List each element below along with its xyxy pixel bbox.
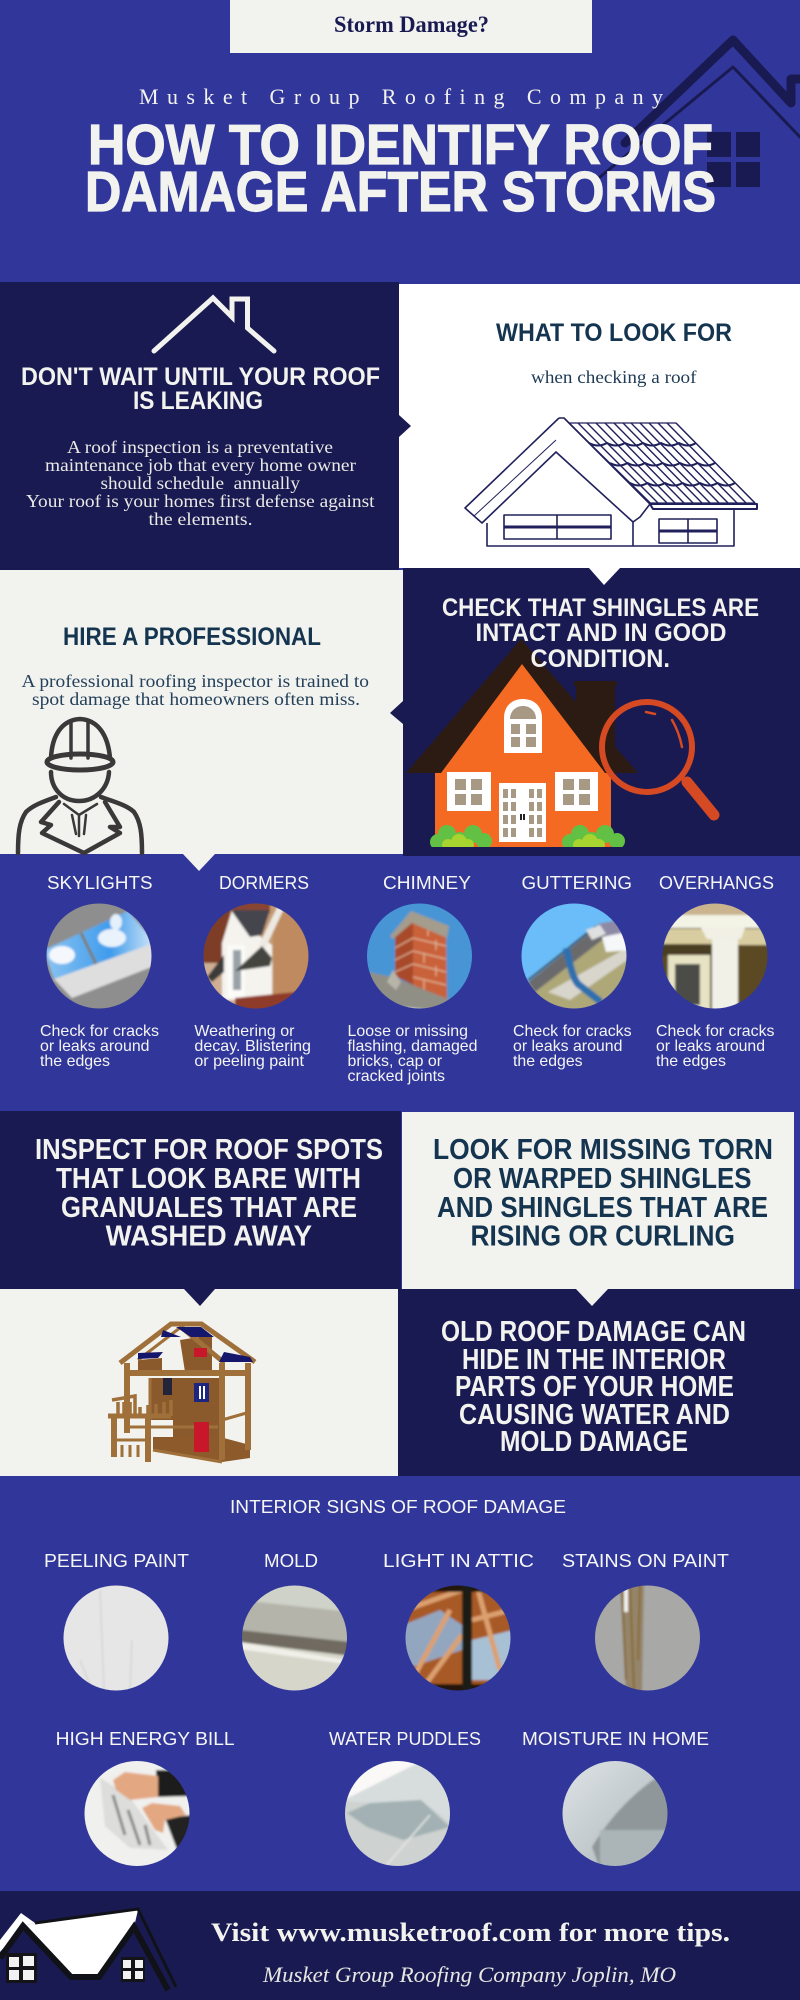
arrow: pointer left <box>390 701 403 724</box>
heading <box>433 1134 773 1253</box>
icon: magnifying glass <box>602 702 714 815</box>
photo: dormer <box>201 901 311 1011</box>
text block: A professional roofing inspector is trained to <box>22 671 369 691</box>
sign: water puddles <box>329 1728 481 1869</box>
bushes <box>428 825 628 856</box>
sign: peeling paint <box>44 1550 189 1693</box>
photo: water puddle <box>342 1759 453 1869</box>
description <box>348 1023 478 1085</box>
door <box>499 783 546 842</box>
description: the edges <box>656 1053 726 1070</box>
panel: wooden house illustration <box>0 1289 398 1476</box>
photo: skylight <box>44 901 154 1011</box>
sign: stains on paint <box>562 1550 729 1693</box>
text block: maintenance job that every home owner <box>45 455 356 475</box>
heading <box>35 1134 383 1253</box>
heading: HIRE A PROFESSIONAL <box>63 623 321 651</box>
feature: guttering <box>513 872 632 1070</box>
badge: storm damage <box>230 0 592 53</box>
illustration: orange house <box>406 639 638 856</box>
heading: AND SHINGLES THAT ARE <box>437 1192 768 1224</box>
sign: mold: MOLD <box>264 1550 318 1571</box>
photo: mold <box>239 1583 350 1693</box>
location line: Musket Group Roofing Company Joplin, MO <box>262 1962 676 1987</box>
feature: skylights <box>40 872 159 1070</box>
feature: dormers <box>194 872 311 1070</box>
text block: Your roof is your homes first defense against <box>26 491 374 511</box>
description: Weathering or <box>194 1023 295 1040</box>
description: decay. Blistering <box>194 1038 311 1055</box>
arrow: pointer down <box>184 1289 215 1306</box>
description <box>513 1023 632 1070</box>
heading: OR WARPED SHINGLES <box>453 1163 752 1195</box>
sign: light in attic <box>383 1550 534 1693</box>
text block: should schedule annually <box>100 473 300 493</box>
photo: moisture <box>560 1759 670 1869</box>
heading <box>21 363 380 415</box>
label: OVERHANGS <box>659 872 774 893</box>
icon: house outline behind title <box>600 40 800 187</box>
panel: check that shingles are intact <box>390 568 800 856</box>
description <box>194 1023 311 1070</box>
description: Check for cracks <box>656 1023 774 1040</box>
photo: attic <box>403 1583 513 1693</box>
heading: WASHED AWAY <box>106 1221 312 1253</box>
description <box>656 1023 774 1070</box>
description: Check for cracks <box>40 1023 159 1040</box>
panel: roof features <box>40 854 774 1085</box>
description: or leaks around <box>513 1038 622 1055</box>
sign: peeling paint: PEELING PAINT <box>44 1550 189 1571</box>
sign: moisture in home: MOISTURE IN HOME <box>522 1728 709 1749</box>
arrow: pointer down from white panel <box>589 568 620 585</box>
text block: A roof inspection is a preventative <box>67 437 333 457</box>
label: CHIMNEY <box>383 872 471 893</box>
heading: MOLD DAMAGE <box>500 1426 688 1458</box>
heading: OLD ROOF DAMAGE CAN <box>441 1316 746 1348</box>
sign: light in attic: LIGHT IN ATTIC <box>383 1550 534 1571</box>
sign: stains on paint: STAINS ON PAINT <box>562 1550 729 1571</box>
description: the edges <box>513 1053 583 1070</box>
call to action: Visit www.musketroof.com for more tips. <box>211 1918 730 1947</box>
heading: IS LEAKING <box>133 387 263 415</box>
text block <box>22 671 369 709</box>
arrow: pointer down <box>576 1289 608 1306</box>
subheading: when checking a roof <box>531 367 697 387</box>
heading: CHECK THAT SHINGLES ARE <box>442 594 759 622</box>
label: SKYLIGHTS <box>47 872 152 893</box>
windows <box>6 1953 145 1983</box>
photo: gutter <box>519 901 630 1011</box>
arrow: pointer down from light panel <box>183 854 215 871</box>
heading: CAUSING WATER AND <box>459 1399 730 1431</box>
icon: roof with chimney <box>154 298 274 351</box>
description: bricks, cap or <box>348 1053 443 1070</box>
description: cracked joints <box>348 1068 445 1085</box>
text block: spot damage that homeowners often miss. <box>32 689 360 709</box>
heading: HIDE IN THE INTERIOR <box>462 1344 726 1376</box>
heading: INTERIOR SIGNS OF ROOF DAMAGE <box>230 1496 566 1517</box>
heading: GRANUALES THAT ARE <box>61 1192 357 1224</box>
heading: THAT LOOK BARE WITH <box>56 1163 361 1195</box>
title: DAMAGE AFTER STORMS <box>85 160 716 223</box>
heading <box>442 594 759 673</box>
icon: house line drawing <box>465 418 757 546</box>
description: or peeling paint <box>194 1053 305 1070</box>
footer <box>0 1891 800 2000</box>
description: Loose or missing <box>348 1023 468 1040</box>
title: HOW TO IDENTIFY ROOF <box>88 113 713 176</box>
photo: overhang <box>660 901 770 1011</box>
panel: look for missing shingles <box>402 1112 794 1289</box>
sign: moisture in home <box>522 1728 709 1869</box>
title <box>85 113 716 223</box>
description: or leaks around <box>40 1038 150 1055</box>
label: DORMERS <box>219 872 309 893</box>
house windows <box>447 772 598 811</box>
illustration: wooden house frame <box>108 1324 255 1462</box>
description: or leaks around <box>656 1038 765 1055</box>
feature: chimney <box>348 872 478 1085</box>
panel: interior signs <box>44 1496 729 1869</box>
heading: RISING OR CURLING <box>470 1221 735 1253</box>
label: GUTTERING <box>522 872 632 893</box>
panel: what to look for <box>399 284 800 568</box>
icon: roofing inspector <box>18 719 142 853</box>
photo: bill <box>82 1759 192 1869</box>
heading: PARTS OF YOUR HOME <box>455 1371 734 1403</box>
sign: water puddles: WATER PUDDLES <box>329 1728 481 1749</box>
panel: inspect for roof spots <box>0 1111 401 1289</box>
heading: INTACT AND IN GOOD <box>476 619 726 647</box>
heading: DON'T WAIT UNTIL YOUR ROOF <box>21 363 380 391</box>
badge: storm damage: Storm Damage? <box>334 12 489 37</box>
photo: chimney <box>367 904 472 1008</box>
sign: high energy bill <box>56 1728 235 1869</box>
icon: house <box>0 1909 176 1990</box>
company name: Musket Group Roofing Company <box>139 84 663 109</box>
heading: WHAT TO LOOK FOR <box>496 319 732 347</box>
description: Check for cracks <box>513 1023 632 1040</box>
panel: hire a professional <box>0 570 403 854</box>
description: the edges <box>40 1053 110 1070</box>
header <box>85 0 800 223</box>
photo: stains <box>593 1583 703 1693</box>
heading: INSPECT FOR ROOF SPOTS <box>35 1134 383 1166</box>
heading <box>441 1316 746 1458</box>
sign: mold <box>239 1550 350 1693</box>
description: flashing, damaged <box>348 1038 478 1055</box>
panel: don't wait until your roof is leaking <box>0 282 411 570</box>
heading: LOOK FOR MISSING TORN <box>433 1134 773 1166</box>
text block: the elements. <box>148 509 252 529</box>
text block <box>26 437 374 529</box>
attic window <box>504 699 542 753</box>
heading: CONDITION. <box>530 645 670 673</box>
arrow: pointer right <box>399 415 411 437</box>
description <box>40 1023 159 1070</box>
sign: high energy bill: HIGH ENERGY BILL <box>56 1728 235 1749</box>
photo: peeling paint <box>61 1583 171 1693</box>
panel: old roof damage <box>398 1289 800 1476</box>
feature: overhangs <box>656 872 774 1070</box>
